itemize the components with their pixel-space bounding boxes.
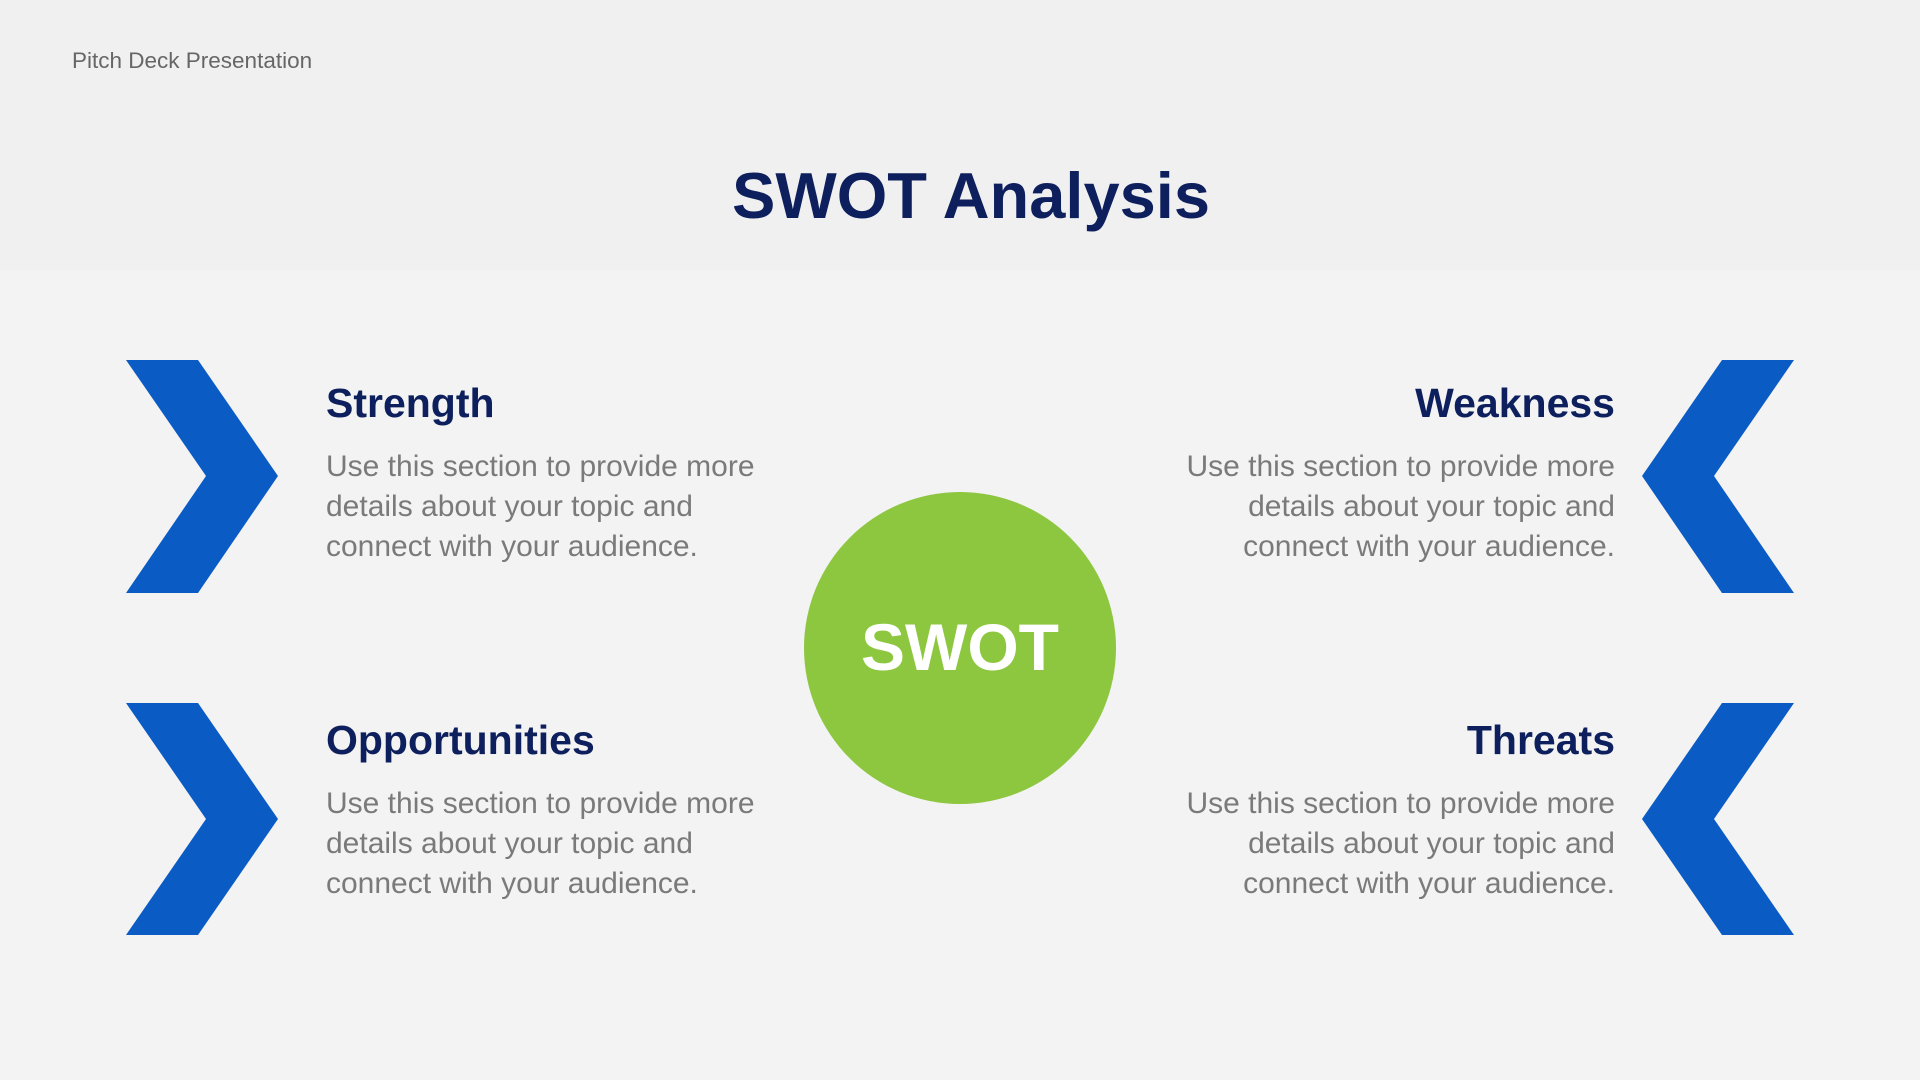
panel: weakness: Weakness [1415, 380, 1615, 426]
panel: weakness: Use this section to provide more [1186, 450, 1615, 483]
panel: threats [1186, 717, 1615, 900]
panel: strength [326, 380, 755, 563]
panel: weakness: connect with your audience. [1243, 530, 1615, 563]
panel: opportunities: Opportunities [326, 717, 595, 763]
panel: opportunities: connect with your audience. [326, 867, 698, 900]
panel: opportunities [326, 717, 755, 900]
panel: strength: details about your topic and [326, 490, 693, 523]
panel: weakness [1186, 380, 1615, 563]
panel: strength: Strength [326, 380, 495, 426]
icon: chevron opportunities [126, 703, 278, 935]
header label: Pitch Deck Presentation [72, 48, 312, 73]
panel: weakness: details about your topic and [1248, 490, 1615, 523]
icon: chevron weakness [1642, 360, 1794, 593]
title: SWOT Analysis [732, 159, 1210, 232]
background panel [0, 0, 1920, 270]
icon: chevron strength [126, 360, 278, 593]
panel: strength: connect with your audience. [326, 530, 698, 563]
panel: threats: details about your topic and [1248, 827, 1615, 860]
panel: opportunities: Use this section to provide more [326, 787, 755, 820]
center circle [804, 492, 1116, 804]
panel: threats: Threats [1467, 717, 1615, 763]
panel: opportunities: details about your topic and [326, 827, 693, 860]
center circle: SWOT [861, 610, 1059, 684]
icon: chevron threats [1642, 703, 1794, 935]
panel: threats: connect with your audience. [1243, 867, 1615, 900]
panel: threats: Use this section to provide more [1186, 787, 1615, 820]
panel: strength: Use this section to provide more [326, 450, 755, 483]
